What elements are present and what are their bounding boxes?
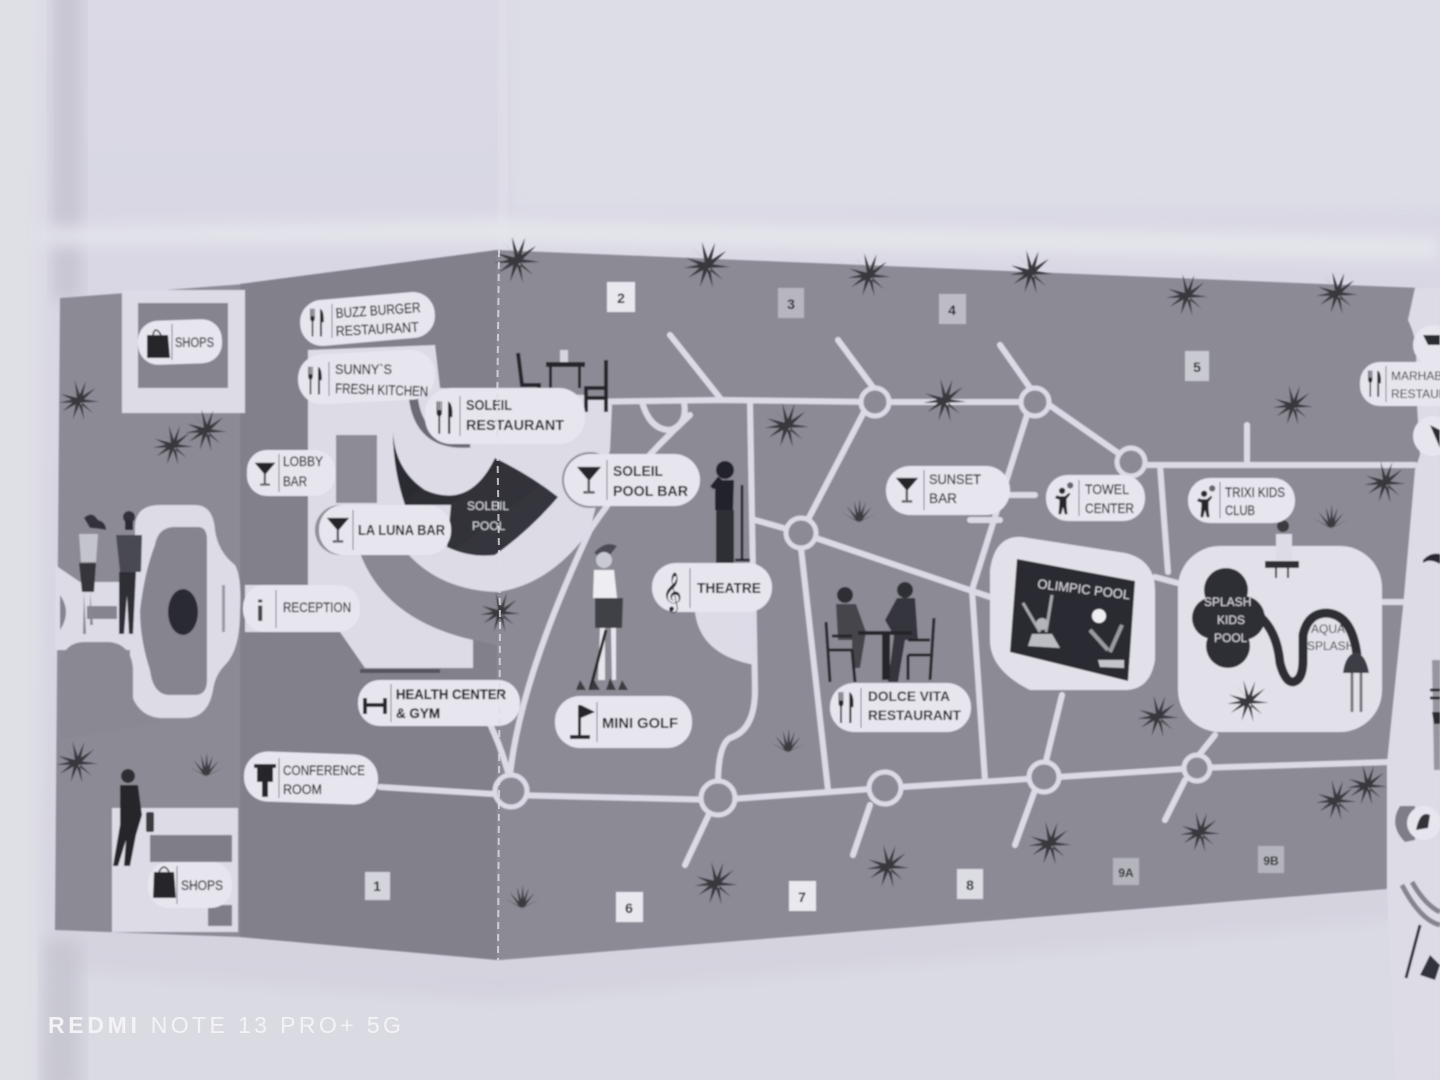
label: Trixi Kids Club xyxy=(1188,478,1295,523)
label: Sunny's Fresh Kitchen xyxy=(297,348,436,406)
plot numbers: 5 xyxy=(1193,359,1201,375)
camera watermark: REDMI NOTE 13 PRO+ 5G xyxy=(48,1012,404,1038)
roads xyxy=(380,335,1415,865)
label: Dolce Vita Restaurant: DOLCE VITA xyxy=(868,688,950,704)
figure: restaurant table xyxy=(518,350,606,412)
fold line xyxy=(497,250,500,960)
label: Soleil Restaurant: RESTAURANT xyxy=(466,417,564,434)
plot numbers: 3 xyxy=(787,296,795,312)
plot numbers: 8 xyxy=(966,877,974,893)
label: Buzz Burger Restaurant: RESTAURANT xyxy=(335,319,419,339)
ground: resort site xyxy=(55,250,1420,960)
label: Towel Center: CENTER xyxy=(1085,500,1134,516)
label: Buzz Burger Restaurant xyxy=(298,290,437,348)
label: Conference Room xyxy=(243,751,379,805)
beach people xyxy=(1395,325,1440,980)
label: Buzz Burger Restaurant: BUZZ BURGER xyxy=(335,299,421,321)
label: Towel Center: TOWEL xyxy=(1085,481,1129,497)
plot numbers: 9B xyxy=(1263,854,1279,868)
label: Soleil Restaurant xyxy=(425,388,585,444)
label: Shops (top) xyxy=(137,319,223,365)
panel: Splash kids pool and aqua splash: SPLASH xyxy=(1307,639,1354,653)
figure: person at kids club xyxy=(1266,520,1298,578)
panel: bottom shops plot xyxy=(112,808,238,932)
plot numbers: 9A xyxy=(1118,866,1134,880)
label: Shops (top): SHOPS xyxy=(175,334,214,350)
label: Soleil Pool Bar: POOL BAR xyxy=(613,483,688,500)
label: Reception: RECEPTION xyxy=(283,599,351,615)
pool: Soleil pool: POOL xyxy=(472,519,506,533)
label: Soleil Restaurant: SOLEIL xyxy=(466,397,512,414)
roundabouts xyxy=(495,388,1210,815)
label: Lobby Bar: BAR xyxy=(283,473,307,489)
label: Sunset Bar: BAR xyxy=(929,490,957,506)
label: Theatre: THEATRE xyxy=(697,580,761,597)
plot numbers: 4 xyxy=(948,302,956,318)
label: La Luna Bar xyxy=(315,505,451,555)
figure: couple at entrance xyxy=(79,511,142,634)
plot numbers: 6 xyxy=(625,900,633,916)
figure: diners at table xyxy=(826,582,934,682)
panel: Splash kids pool and aqua splash: AQUA xyxy=(1311,622,1345,636)
pool: Soleil pool xyxy=(393,432,558,556)
plot numbers xyxy=(365,282,1284,922)
label: Sunny's Fresh Kitchen: FRESH KITCHEN xyxy=(335,380,428,399)
panel: lower-left ground shade xyxy=(240,250,497,960)
panel: Splash kids pool and aqua splash: SPLASH xyxy=(1204,595,1251,609)
label: Soleil Pool Bar: SOLEIL xyxy=(613,463,663,480)
label: Sunset Bar xyxy=(886,466,1010,515)
panel: entrance forecourt xyxy=(55,505,240,740)
label: Shops (bottom): SHOPS xyxy=(181,877,223,893)
panel: Splash kids pool and aqua splash xyxy=(1178,546,1382,732)
panel: Splash kids pool and aqua splash: POOL xyxy=(1214,631,1248,645)
panel: Olympic pool xyxy=(990,537,1155,690)
panel: hotel terrace xyxy=(245,345,612,673)
label: Trixi Kids Club: TRIXI KIDS xyxy=(1225,484,1285,500)
label: Health Center and Gym: & GYM xyxy=(396,705,440,721)
label: Mini Golf: MINI GOLF xyxy=(602,715,678,732)
label: La Luna Bar: LA LUNA BAR xyxy=(358,522,445,539)
label: Dolce Vita Restaurant xyxy=(830,683,971,732)
label: Theatre xyxy=(652,563,772,613)
panel: Splash kids pool and aqua splash: KIDS xyxy=(1217,613,1245,627)
central fountain xyxy=(168,589,198,635)
label: Lobby Bar: LOBBY xyxy=(283,453,324,469)
label: Health Center and Gym: HEALTH CENTER xyxy=(396,686,506,702)
label: Marhaba Restaurant xyxy=(1360,362,1440,406)
plot numbers: 1 xyxy=(373,878,381,894)
label: Soleil Pool Bar xyxy=(562,452,700,508)
panel: Olympic pool: OLIMPIC POOL xyxy=(1037,576,1131,602)
label: Sunny's Fresh Kitchen: SUNNY`S xyxy=(335,361,392,377)
label: Conference Room: CONFERENCE xyxy=(283,762,365,778)
panel: beach strip xyxy=(1387,288,1440,1080)
label: Lobby Bar xyxy=(247,450,335,496)
panel: top shops plot xyxy=(122,290,245,413)
label: Reception: i xyxy=(256,595,264,628)
label: Sunset Bar: SUNSET xyxy=(929,471,981,487)
figure: golfer xyxy=(576,544,628,690)
label: Shops (bottom) xyxy=(148,862,232,908)
label: Mini Golf xyxy=(555,696,692,748)
label: Conference Room: ROOM xyxy=(283,781,322,797)
palms and plants xyxy=(56,237,1406,909)
figure: woman with bag xyxy=(113,769,154,866)
label: Dolce Vita Restaurant: RESTAURANT xyxy=(868,707,961,723)
plot numbers: 2 xyxy=(617,290,625,306)
label: Theatre: 𝄞 xyxy=(662,573,682,613)
label: Health Center and Gym xyxy=(358,680,520,726)
label: Reception xyxy=(243,585,360,632)
panel: theatre stage xyxy=(695,610,755,665)
label: Towel Center xyxy=(1046,475,1145,521)
pool: Soleil pool: SOLEIL xyxy=(467,499,509,513)
label: Trixi Kids Club: CLUB xyxy=(1225,502,1255,518)
figure: singer on stage xyxy=(712,461,750,563)
plot numbers: 7 xyxy=(798,889,806,905)
